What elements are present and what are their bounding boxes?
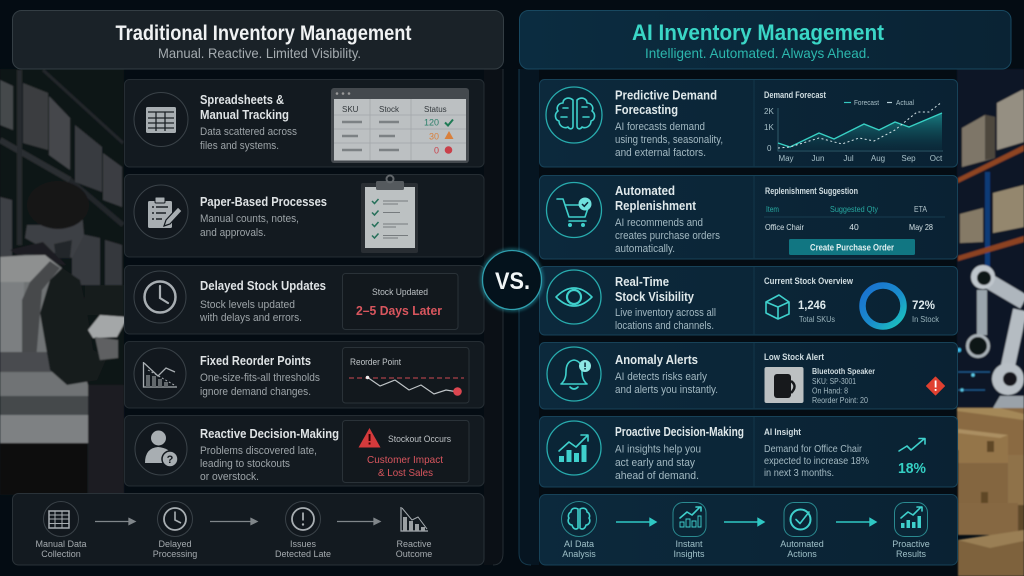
- icon: eye: [547, 270, 601, 324]
- background photo: warehouse worker: [0, 69, 128, 495]
- text block: Problems discovered late,: [200, 445, 317, 457]
- spreadsheet mockup: 30: [429, 132, 439, 142]
- text block: and external factors.: [615, 147, 706, 159]
- text block: [200, 93, 297, 152]
- text block: Replenishment: [615, 199, 697, 213]
- text block: Fixed Reorder Points: [200, 354, 311, 368]
- process flow: traditional: [12, 494, 484, 565]
- right header: [520, 10, 1011, 69]
- chart: demand forecast: Jul: [843, 154, 854, 163]
- step: manual data collection: [35, 502, 87, 559]
- text block: Reactive Decision-Making: [200, 427, 339, 441]
- table: replenishment suggestion: May 28: [909, 222, 933, 232]
- arrow: [836, 518, 876, 526]
- chart: demand forecast: 2K: [764, 107, 774, 116]
- text block: [200, 354, 320, 398]
- text block: [199, 279, 326, 324]
- table: replenishment suggestion: Replenishment Suggestion: [765, 186, 858, 196]
- low stock alert: [764, 352, 944, 405]
- text block: [615, 353, 718, 396]
- text block: files and systems.: [200, 140, 279, 152]
- text block: leading to stockouts: [200, 458, 290, 470]
- clipboard illustration: [361, 176, 418, 253]
- button: create purchase order: Create Purchase Order: [810, 242, 894, 252]
- left header: [12, 10, 504, 69]
- icon: cart with check: [546, 182, 602, 238]
- row: delayed updates: [124, 266, 484, 334]
- callout: stockout: & Lost Sales: [378, 467, 433, 479]
- text block: AI forecasts demand: [615, 121, 705, 133]
- text block: [615, 425, 744, 482]
- row: reactive decisions: [124, 416, 484, 486]
- table: replenishment suggestion: Item: [766, 204, 779, 214]
- text block: and approvals.: [200, 227, 266, 239]
- chart: demand forecast: Aug: [871, 154, 885, 163]
- text block: using trends, seasonality,: [615, 134, 723, 146]
- step: delayed processing: [153, 502, 197, 559]
- text block: Spreadsheets &: [200, 93, 284, 107]
- icon: brain: [546, 87, 602, 143]
- chart: demand forecast: 0: [767, 144, 772, 153]
- AI insight: in next 3 months.: [764, 468, 834, 479]
- right panel: AI inventory management: [519, 10, 1011, 565]
- icon: person with question: [135, 423, 187, 475]
- icon: spreadsheet: [134, 92, 188, 146]
- step: proactive results: [892, 502, 930, 559]
- low stock alert: Low Stock Alert: [764, 352, 824, 362]
- product image: speaker: [764, 367, 804, 403]
- step: delayed processing: Processing: [153, 549, 197, 559]
- step: issues detected late: [275, 502, 331, 559]
- text block: [615, 275, 716, 332]
- VS badge: [482, 250, 542, 310]
- step: automated actions: [780, 502, 824, 559]
- text block: [200, 427, 339, 483]
- icon: growth chart: [547, 421, 601, 475]
- step: issues detected late: Detected Late: [275, 549, 331, 559]
- low stock alert: Reorder Point: 20: [812, 396, 868, 405]
- text block: ahead of demand.: [615, 470, 699, 482]
- left title: Traditional Inventory Management: [116, 21, 412, 45]
- row: anomaly alerts: [540, 342, 958, 409]
- stock overview: In Stock: [912, 315, 940, 324]
- stock overview: Current Stock Overview: [764, 276, 854, 286]
- step: proactive results: Proactive: [892, 539, 930, 549]
- table: replenishment suggestion: Suggested Qty: [830, 204, 879, 214]
- text block: Predictive Demand: [615, 88, 717, 102]
- text block: Live inventory across all: [615, 307, 716, 319]
- stock overview: [764, 276, 940, 326]
- text block: ignore demand changes.: [200, 386, 311, 398]
- text block: locations and channels.: [615, 320, 714, 332]
- icon: cube: [766, 295, 789, 319]
- low stock alert: Bluetooth Speaker: [812, 367, 875, 376]
- text block: creates purchase orders: [615, 230, 720, 242]
- donut chart: [862, 286, 904, 326]
- spreadsheet mockup: Status: [424, 105, 447, 114]
- table: replenishment suggestion: [764, 186, 945, 255]
- left panel: traditional inventory management: [12, 10, 504, 565]
- text block: AI insights help you: [615, 444, 701, 456]
- right subtitle: Intelligent. Automated. Always Ahead.: [645, 45, 870, 61]
- step: manual data collection: Manual Data: [35, 539, 87, 549]
- callout: stock updated: [342, 274, 458, 330]
- step: AI data analysis: [562, 502, 596, 559]
- step: AI data analysis: Analysis: [562, 549, 596, 559]
- step: instant insights: Instant: [675, 539, 703, 549]
- chart: demand forecast: [764, 90, 943, 163]
- spreadsheet mockup: SKU: [342, 105, 359, 114]
- text block: [615, 88, 723, 159]
- text block: Proactive Decision-Making: [615, 425, 744, 439]
- callout: stockout: Stockout Occurs: [388, 434, 451, 444]
- text block: Manual counts, notes,: [200, 213, 299, 225]
- chart: demand forecast: Forecast: [854, 98, 880, 107]
- chart: demand forecast: Sep: [901, 154, 916, 163]
- step: manual data collection: Collection: [41, 549, 81, 559]
- row: real-time visibility: [540, 266, 958, 335]
- arrow: [337, 518, 380, 524]
- text block: Delayed Stock Updates: [200, 279, 326, 293]
- icon: bell: [547, 347, 601, 401]
- row: paper-based: [124, 174, 484, 257]
- right title: AI Inventory Management: [632, 20, 885, 45]
- AI insight: AI Insight: [764, 427, 801, 437]
- icon: person with question: ?: [167, 454, 174, 466]
- spreadsheet mockup: [331, 88, 469, 163]
- callout: stock updated: 2–5 Days Later: [356, 303, 442, 318]
- spreadsheet mockup: 0: [434, 146, 439, 156]
- icon: trend arrow: [899, 438, 925, 451]
- AI insight: 18%: [898, 460, 926, 477]
- text block: or overstock.: [200, 471, 259, 483]
- row: fixed reorder points: [124, 342, 484, 408]
- step: reactive outcome: Reactive: [396, 539, 432, 549]
- text block: automatically.: [615, 243, 675, 255]
- icon: warning diamond: [926, 377, 944, 395]
- row: spreadsheets: [124, 80, 484, 167]
- worker neck and face: [25, 212, 84, 258]
- chart: demand forecast: Actual: [896, 98, 914, 107]
- icon: declining chart: [134, 348, 186, 400]
- stock overview: Total SKUs: [799, 315, 835, 324]
- chart: demand forecast: Jun: [812, 154, 824, 163]
- AI insight: Demand for Office Chair: [764, 444, 863, 455]
- stock overview: 72%: [912, 298, 935, 312]
- row: predictive forecasting: [540, 80, 958, 167]
- step: instant insights: [673, 502, 706, 559]
- text block: Manual Tracking: [200, 108, 289, 122]
- text block: and alerts you instantly.: [615, 384, 718, 396]
- text block: Data scattered across: [200, 126, 297, 138]
- table: replenishment suggestion: Office Chair: [765, 222, 804, 232]
- chart: demand forecast: Demand Forecast: [764, 90, 826, 100]
- step: issues detected late: Issues: [290, 539, 317, 549]
- step: delayed processing: Delayed: [158, 539, 192, 549]
- row: automated replenishment: [540, 176, 958, 259]
- step: AI data analysis: AI Data: [564, 539, 594, 549]
- step: reactive outcome: [396, 507, 432, 559]
- arrow: [95, 518, 135, 524]
- text block: with delays and errors.: [199, 312, 302, 324]
- callout: stockout: Customer Impact: [367, 454, 443, 466]
- step: reactive outcome: Outcome: [396, 549, 432, 559]
- chart: demand forecast: 1K: [764, 123, 774, 132]
- table: replenishment suggestion: 40: [849, 222, 859, 232]
- callout: stock updated: Stock Updated: [372, 287, 428, 297]
- background photo: robotic warehouse with boxes: [957, 69, 1024, 576]
- chart: demand forecast: May: [778, 154, 794, 163]
- callout: stockout: [342, 420, 469, 482]
- icon: clock: [134, 271, 186, 323]
- icon: paper clipboard with pencil: [134, 185, 188, 239]
- VS badge: VS.: [495, 268, 530, 295]
- text block: Real-Time: [615, 275, 669, 289]
- row: proactive decisions: [540, 416, 958, 487]
- AI insight: [764, 427, 926, 479]
- text block: AI detects risks early: [615, 371, 707, 383]
- table: replenishment suggestion: ETA: [914, 204, 927, 214]
- low stock alert: SKU: SP-3001: [812, 377, 856, 386]
- step: instant insights: Insights: [673, 549, 705, 559]
- text block: One-size-fits-all thresholds: [200, 372, 320, 384]
- arrow: [210, 518, 257, 524]
- step: automated actions: Actions: [787, 549, 817, 559]
- button: create purchase order: [789, 239, 915, 255]
- text block: AI recommends and: [615, 217, 703, 229]
- text block: Anomaly Alerts: [615, 353, 698, 367]
- text block: Forecasting: [615, 103, 678, 117]
- step: automated actions: Automated: [780, 539, 824, 549]
- chart: reorder point: [342, 348, 469, 403]
- text block: Paper-Based Processes: [200, 195, 327, 209]
- low stock alert: On Hand: 8: [812, 386, 848, 396]
- AI insight: expected to increase 18%: [764, 456, 869, 467]
- process flow: AI: [540, 494, 958, 565]
- text block: [615, 184, 720, 255]
- text block: [200, 195, 327, 239]
- arrow: [616, 518, 656, 526]
- spreadsheet mockup: Stock: [379, 105, 400, 114]
- text block: Stock Visibility: [615, 290, 694, 304]
- text block: Automated: [615, 184, 675, 198]
- spreadsheet mockup: 120: [424, 118, 439, 128]
- step: proactive results: Results: [896, 549, 927, 559]
- text block: Stock levels updated: [200, 299, 295, 311]
- arrow: [724, 518, 764, 526]
- chart: reorder point: Reorder Point: [350, 357, 401, 367]
- stock overview: 1,246: [798, 298, 826, 312]
- left subtitle: Manual. Reactive. Limited Visibility.: [158, 45, 361, 61]
- chart: demand forecast: Oct: [930, 154, 943, 163]
- text block: act early and stay: [615, 457, 695, 469]
